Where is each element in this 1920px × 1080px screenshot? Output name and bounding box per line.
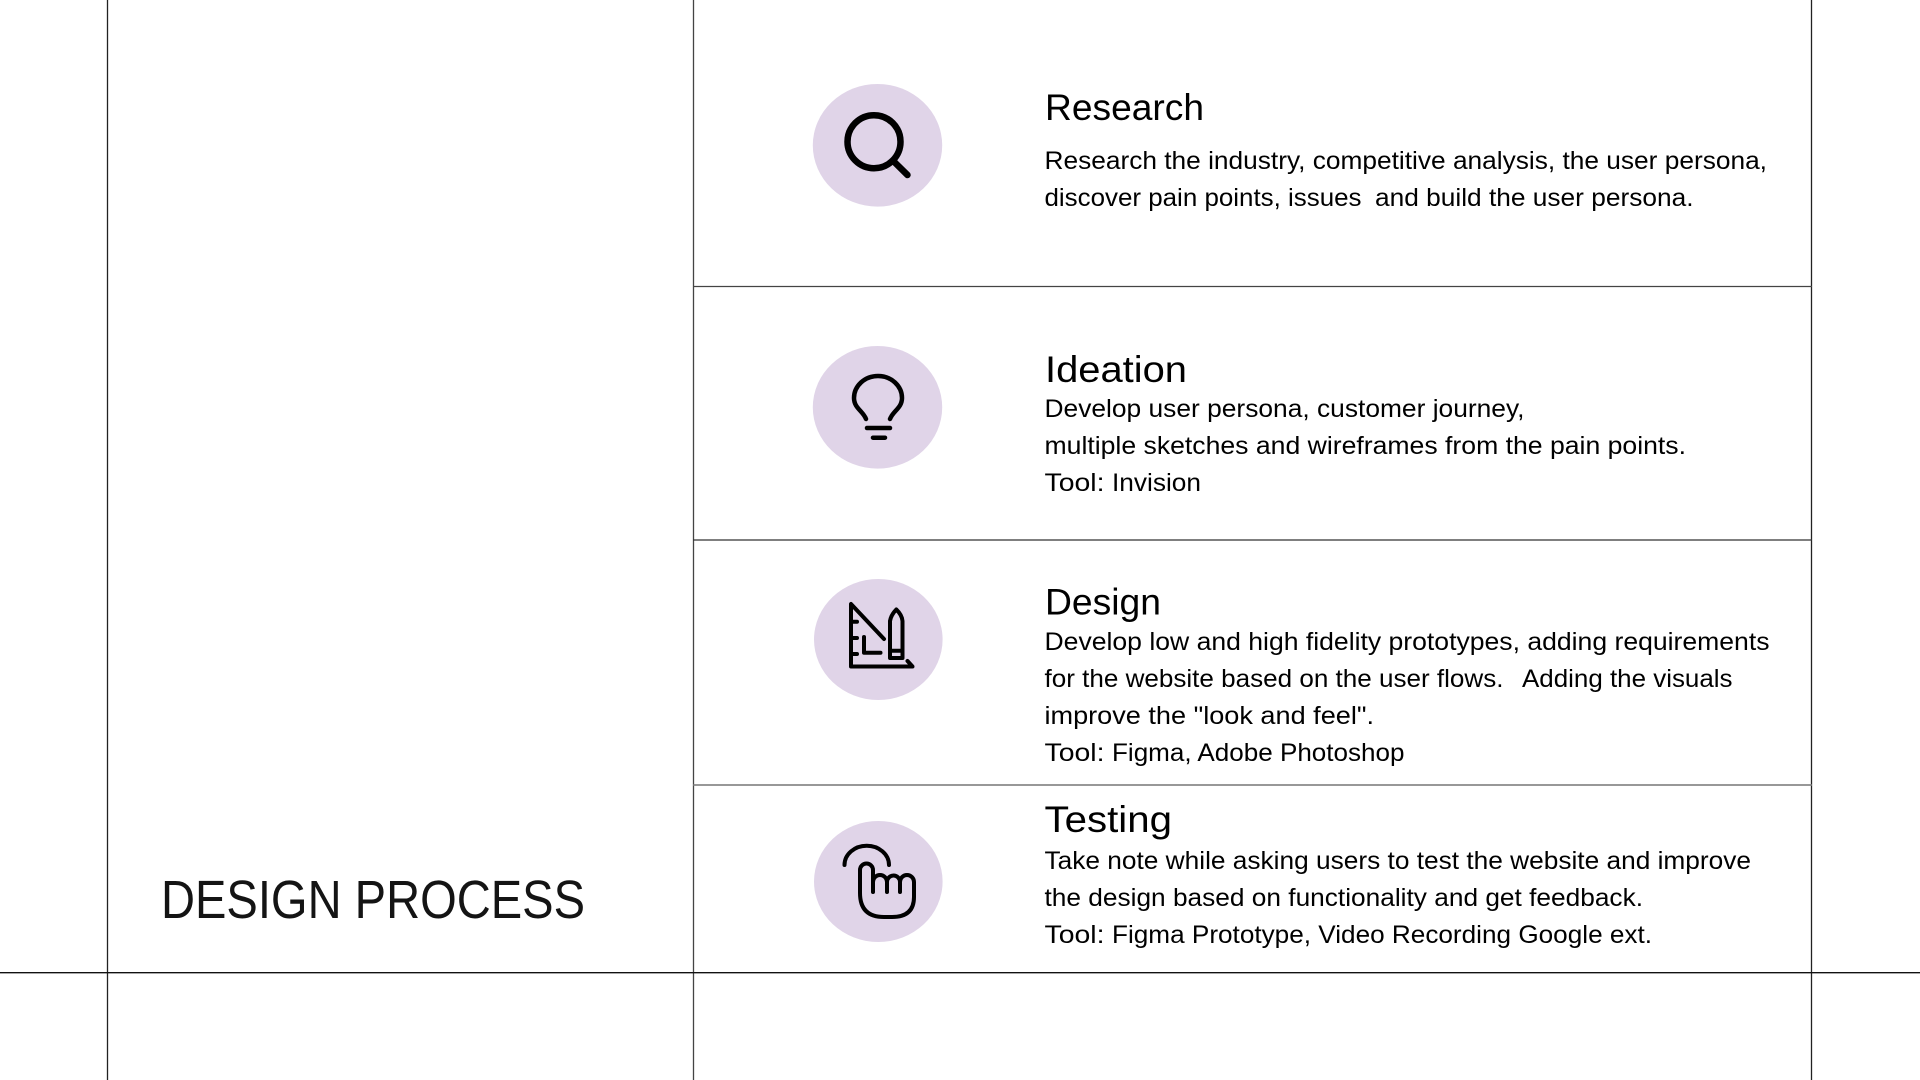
title: DESIGN PROCESS (161, 870, 585, 930)
icon: magnifying glass (813, 84, 942, 207)
text: design description (1044, 628, 1770, 767)
text: research description: and build the user persona. (1375, 184, 1694, 212)
heading: testing: Testing (1044, 799, 1172, 840)
text: testing description: the design based on functionality and get feedback. (1044, 884, 1643, 912)
panel: ideation (813, 346, 1686, 497)
panel: research (813, 84, 1767, 212)
text: design description: Tool: (1044, 739, 1104, 767)
text: testing description (1044, 847, 1751, 949)
text: research description: Research the industry, competitive analysis, the user persona, (1044, 147, 1767, 175)
icon: light bulb (813, 346, 942, 469)
heading: ideation: Ideation (1045, 349, 1187, 390)
text: testing description: Tool: (1044, 921, 1104, 949)
text: ideation description: Develop user persona, customer journey, (1044, 395, 1524, 423)
text: design description: improve the "look and feel". (1044, 702, 1374, 730)
text: design description: Adding the visuals (1522, 665, 1732, 693)
icon: ruler and pencil (814, 579, 943, 700)
panel: design (814, 579, 1770, 767)
text: design description: Figma, Adobe Photoshop (1112, 739, 1404, 767)
text: ideation description (1044, 395, 1686, 497)
text: ideation description: multiple sketches and wireframes from the pain points. (1044, 432, 1686, 460)
text: research description (1044, 147, 1767, 212)
icon: tapping hand (814, 821, 943, 942)
text: research description: discover pain points, issues (1044, 184, 1362, 212)
text: ideation description: Invision (1112, 469, 1201, 497)
text: design description: for the website based on the user flows. (1044, 665, 1504, 693)
text: testing description: Take note while asking users to test the website and improve (1044, 847, 1751, 875)
text: ideation description: Tool: (1044, 469, 1104, 497)
text: testing description: Figma Prototype, Video Recording Google ext. (1112, 921, 1652, 949)
heading: design: Design (1045, 582, 1161, 622)
panel: testing (814, 799, 1751, 949)
heading: research: Research (1045, 87, 1204, 128)
text: design description: Develop low and high fidelity prototypes, adding requirements (1044, 628, 1770, 656)
